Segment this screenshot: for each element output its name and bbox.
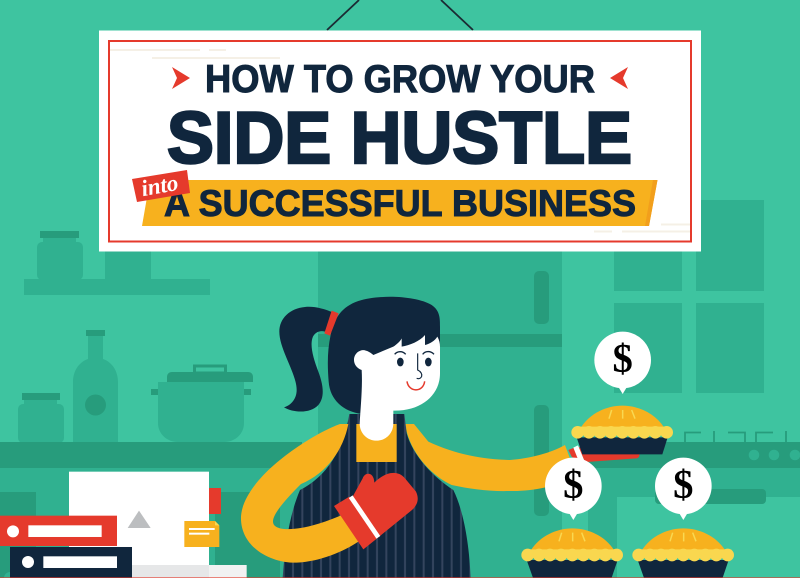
yellow shirt collar — [356, 424, 397, 462]
hair tie — [324, 311, 339, 336]
eyes — [397, 358, 404, 366]
heading line two: SIDE HUSTLE — [167, 98, 632, 179]
smile — [407, 381, 425, 390]
sign border — [109, 41, 691, 242]
face and neck — [354, 335, 440, 441]
yellow sticky note — [184, 521, 219, 547]
red tab — [209, 488, 221, 514]
refrigerator — [318, 200, 562, 578]
window — [614, 200, 764, 393]
title sign — [99, 30, 701, 252]
eyebrows — [395, 352, 434, 354]
into tag — [132, 170, 190, 202]
sign board — [99, 30, 701, 252]
jar on counter — [18, 393, 64, 443]
wall shelf with jar and box — [24, 231, 210, 295]
left arm — [241, 424, 358, 563]
hanging rope — [327, 0, 473, 30]
grey triangle — [128, 511, 151, 528]
top price bubble — [594, 332, 651, 394]
baker character — [241, 297, 577, 578]
bottom left price bubble — [545, 458, 602, 520]
paper sheet — [69, 472, 209, 567]
top pie — [571, 406, 673, 454]
nose — [417, 353, 422, 379]
bottom left pie — [521, 528, 623, 578]
red label card — [0, 516, 117, 546]
counter top — [0, 442, 302, 468]
top price bubble: $ — [613, 336, 633, 381]
right arm — [406, 424, 577, 491]
stove and right counter — [588, 431, 800, 578]
heading line one: HOW TO GROW YOUR — [205, 58, 595, 101]
apron — [283, 414, 471, 578]
left arrow — [172, 67, 190, 89]
bottom left price bubble: $ — [563, 462, 583, 507]
bottom right price bubble — [655, 458, 712, 520]
yellow banner — [142, 180, 658, 226]
heading line three: A SUCCESSFUL BUSINESS — [164, 182, 636, 224]
into tag: into — [139, 170, 180, 201]
kitchen backdrop — [0, 200, 800, 578]
mitt holding pie — [568, 445, 639, 463]
navy label card — [10, 547, 132, 578]
desk items bottom left — [0, 472, 247, 578]
bottle — [73, 330, 118, 443]
lower cabinet left — [0, 468, 318, 578]
paper stack base — [132, 565, 247, 578]
ponytail — [279, 307, 333, 412]
right arrow — [610, 67, 628, 89]
oven mitt on chest — [334, 473, 418, 549]
hair — [328, 297, 440, 414]
cooking pot — [151, 366, 253, 442]
bottom right pie — [632, 528, 734, 578]
pies and price bubbles — [521, 332, 734, 578]
cream accent lines — [110, 49, 691, 232]
bottom right price bubble: $ — [673, 462, 693, 507]
